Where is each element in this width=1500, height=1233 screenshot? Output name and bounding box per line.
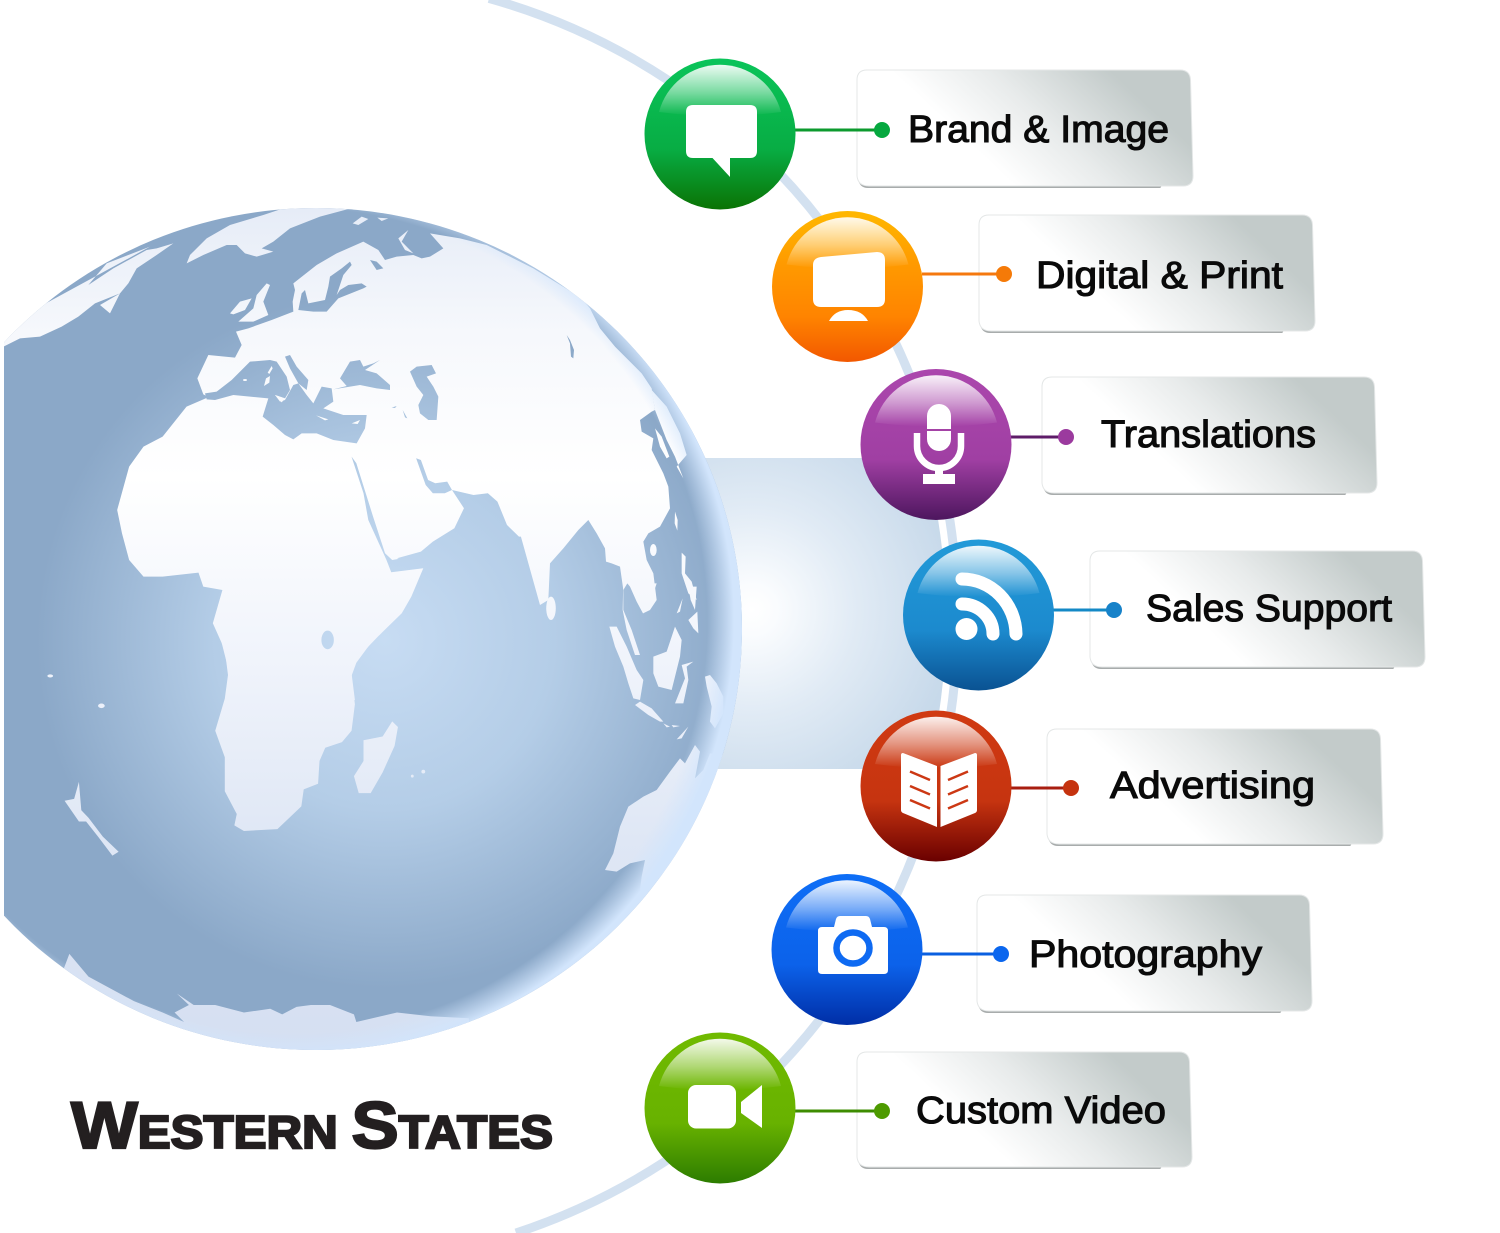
title: WESTERN STATES (71, 1088, 553, 1162)
icon: speech bubble (686, 105, 757, 177)
button: Sales Support (903, 540, 1122, 690)
icon: open book (901, 753, 977, 827)
icon: video camera (688, 1085, 762, 1128)
card: Advertising (1047, 729, 1383, 846)
globe (0, 200, 760, 1060)
card: Translations: Translations (1101, 414, 1316, 456)
orbit arc (489, 0, 957, 1233)
button: Brand & Image (644, 58, 890, 210)
card: Digital & Print (979, 215, 1315, 333)
card: Brand & Image (857, 70, 1193, 188)
globe ocean (0, 208, 742, 1050)
icon: rss (956, 579, 1016, 640)
icon: microphone (917, 404, 961, 484)
card: Sales Support: Sales Support (1146, 588, 1392, 630)
button: Custom Video (644, 1032, 890, 1184)
card: Translations (1042, 377, 1377, 495)
globe rim glow (0, 208, 742, 1050)
button: Advertising (860, 710, 1079, 862)
icon: camera (818, 916, 888, 974)
card: Photography (977, 895, 1312, 1013)
card: Advertising: Advertising (1110, 765, 1315, 807)
globe continents (0, 200, 760, 1060)
card: Sales Support (1090, 551, 1425, 669)
card: Photography: Photography (1029, 934, 1262, 976)
card: Custom Video: Custom Video (916, 1090, 1166, 1132)
card: Brand & Image: Brand & Image (908, 109, 1169, 151)
button: Translations (860, 369, 1074, 520)
button: Digital & Print (772, 211, 1012, 362)
card: Custom Video (857, 1052, 1192, 1169)
card: Digital & Print: Digital & Print (1036, 255, 1283, 297)
icon: monitor (813, 252, 885, 321)
button: Photography (772, 874, 1009, 1025)
light band between globe and buttons (700, 458, 946, 769)
